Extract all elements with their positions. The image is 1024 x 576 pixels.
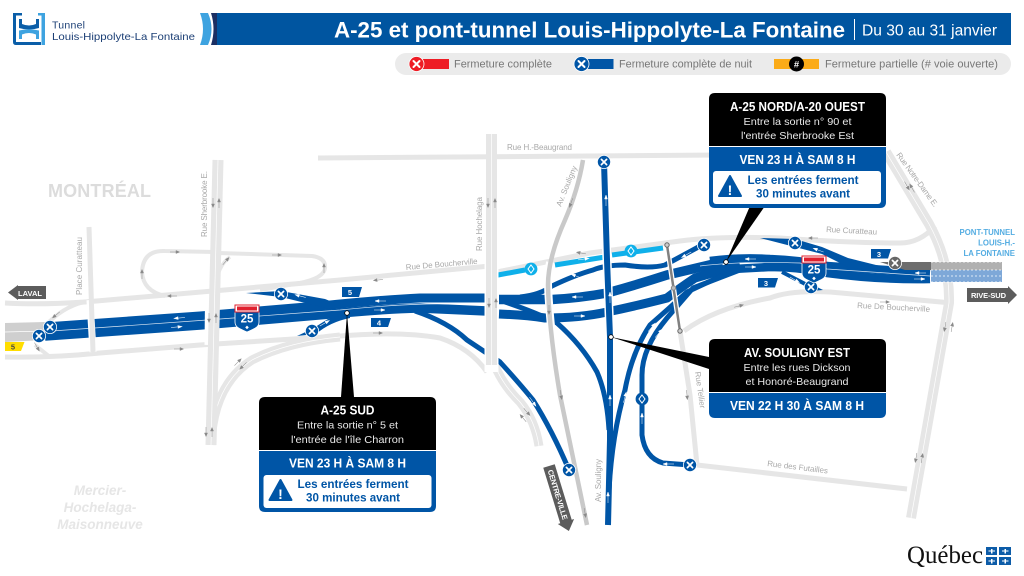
callout: A-25 Sud: ! (278, 486, 283, 502)
direction sign: Rive-Sud: RIVE-SUD (971, 291, 1007, 300)
callout: A-25 Nord / A-20 Ouest: Les entrées ferment (748, 173, 859, 187)
callout: A-25 Sud: VEN 23 H À SAM 8 H (289, 456, 406, 470)
legend: partial closure: Fermeture partielle (# voie ouverte) (825, 58, 998, 70)
tunnel section, right end (880, 262, 1002, 282)
header logo: tunnel (13, 13, 45, 45)
header crescent accent (200, 13, 218, 45)
pont-tunnel label: PONT-TUNNEL (960, 228, 1015, 237)
Québec flag (986, 547, 1011, 565)
legend (395, 53, 1011, 75)
callout: A-25 Nord / A-20 Ouest: VEN 23 H À SAM 8 H (740, 152, 856, 167)
exit number signs: 3 (764, 279, 768, 288)
callout: A-25 Sud: Les entrées ferment (298, 477, 409, 491)
street labels: Av. Souligny (594, 459, 603, 502)
centre diverging ramp (505, 302, 609, 430)
street labels: Rue Hochelaga (475, 196, 484, 251)
exit number signs: 4 (377, 318, 382, 328)
map: streets crossing over the highway (89, 134, 587, 525)
exit number signs: 5 (11, 342, 15, 352)
cyan detour (498, 248, 663, 275)
header title bar (217, 13, 1011, 45)
callout: A-25 Nord / A-20 Ouest: 30 minutes avant (756, 186, 850, 200)
callout: Av. Souligny Est (609, 335, 886, 418)
pont-tunnel label: LOUIS-H.- (978, 238, 1015, 248)
street labels: Rue Tellier (693, 371, 707, 409)
map: A-25 night closure ramps and lanes (45, 238, 930, 490)
souligny ramp east outer (609, 272, 730, 490)
street labels: Rue H.-Beaugrand (507, 143, 572, 152)
callout: A-25 Sud: A-25 SUD (320, 404, 374, 418)
legend: complete closure: Fermeture complète (454, 58, 552, 70)
street labels: Rue Curatteau (826, 225, 877, 237)
closed overpass link (665, 243, 682, 333)
legend: partial closure (774, 56, 998, 72)
callout: A-25 Sud: l'entrée de l'île Charron (291, 434, 404, 446)
map: Av. Souligny east closure (604, 162, 610, 525)
detour markers (525, 245, 648, 405)
borough label: Hochelaga- (64, 500, 137, 515)
direction sign: Laval (8, 285, 46, 300)
callout: A-25 Nord / A-20 Ouest (709, 93, 886, 264)
street labels: Rue des Futailles (767, 459, 828, 475)
legend: partial closure: # (794, 60, 800, 70)
east upper lane (710, 258, 930, 273)
callout: A-25 Sud: 30 minutes avant (306, 490, 400, 504)
pont-tunnel label (960, 228, 1015, 258)
exit number signs: 3 (877, 250, 881, 259)
pont-tunnel label: LA FONTAINE (963, 249, 1015, 258)
street labels: Av. Souligny (555, 165, 579, 208)
closure markers (32, 155, 902, 477)
direction arrows (33, 181, 954, 518)
header logo name: Louis-Hippolyte-La Fontaine (52, 31, 195, 43)
legend: night closure (574, 56, 752, 72)
callout: Av. Souligny Est: et Honoré-Beaugrand (746, 376, 849, 388)
exit to centre-ville (415, 311, 569, 470)
ramp near first X (246, 291, 345, 309)
street labels: Rue Sherbrooke E. (200, 171, 209, 237)
header logo name: Tunnel (52, 20, 85, 32)
street labels: Place Curatteau (75, 237, 84, 295)
borough label: Mercier- (74, 483, 127, 498)
map: local streets under the highway (5, 152, 952, 518)
exit number signs: 5 (348, 288, 352, 297)
street labels (75, 143, 940, 502)
callout: A-25 Nord / A-20 Ouest: ! (728, 182, 732, 198)
south main lanes west (45, 298, 487, 327)
direction sign: Rive-Sud (967, 286, 1017, 304)
callout: Av. Souligny Est: AV. SOULIGNY EST (744, 346, 850, 360)
east upper taper (760, 238, 895, 273)
centre lower band (499, 265, 740, 318)
title: A-25 et pont-tunnel Louis-Hippolyte-La Fontaine (334, 18, 845, 42)
callout: Av. Souligny Est: Entre les rues Dickson (744, 362, 851, 374)
Québec logo: Québec (907, 542, 983, 569)
street labels: Rue Notre-Dame E. (894, 151, 940, 209)
exit number signs (5, 249, 891, 352)
callout: A-25 Nord / A-20 Ouest: A-25 NORD/A-20 OUEST (730, 100, 865, 114)
ramp to X at 811 (782, 272, 811, 287)
header logo name (52, 20, 195, 43)
direction sign: Laval: LAVAL (18, 289, 42, 298)
east lower lane (715, 267, 930, 279)
legend: complete closure (409, 56, 552, 72)
borough label: Maisonneuve (57, 517, 143, 532)
highway shield A-25 east (802, 256, 826, 283)
legend: night closure: Fermeture complète de nuit (619, 58, 752, 70)
highway shield A-25 west (235, 305, 259, 332)
direction sign: Centre-ville: CENTRE-VILLE (546, 469, 569, 521)
centre upper branch (520, 244, 704, 297)
callout: A-25 Nord / A-20 Ouest: Entre la sortie n° 90 et (744, 116, 852, 128)
callout: A-25 Sud: Entre la sortie n° 5 et (297, 420, 398, 432)
date: Du 30 au 31 janvier (862, 22, 997, 40)
callout: Av. Souligny Est: VEN 22 H 30 À SAM 8 H (730, 398, 864, 413)
street labels: Rue De Boucherville (857, 301, 931, 314)
street labels: Rue De Boucherville (405, 257, 478, 272)
north main lanes west (45, 308, 487, 336)
city label: Montréal: MONTRÉAL (48, 180, 151, 201)
lane divider (45, 304, 450, 332)
ramp near second X (297, 313, 350, 336)
callout: A-25 Nord / A-20 Ouest: l'entrée Sherbrooke Est (741, 130, 854, 142)
callout: A-25 Sud (259, 311, 436, 512)
centre upper band (499, 262, 722, 300)
souligny ramp east inner (642, 268, 745, 465)
borough label (57, 483, 143, 532)
direction sign: Centre-ville (541, 464, 577, 534)
